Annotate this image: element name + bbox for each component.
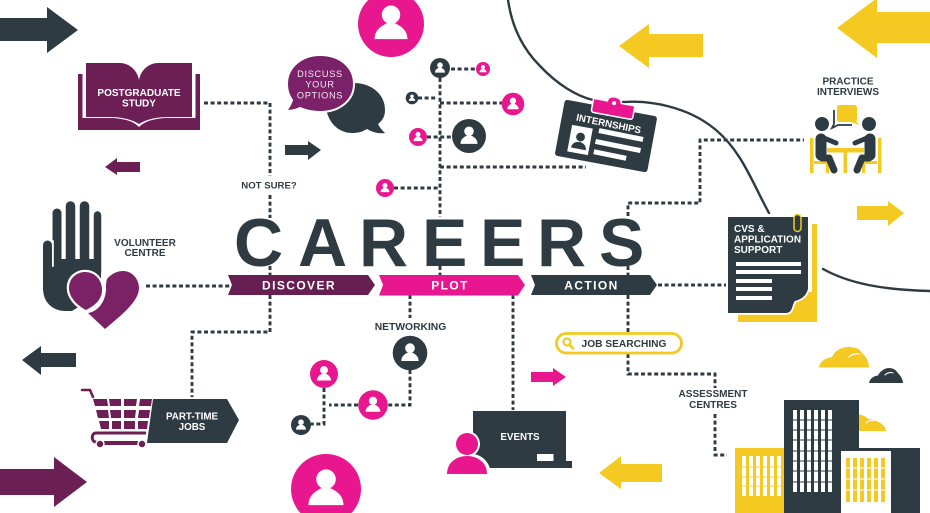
tower windows bbox=[793, 410, 832, 492]
card photo bbox=[567, 125, 593, 155]
arrow: yellow right bbox=[857, 201, 904, 226]
search pill: job searching: JOB SEARCHING bbox=[582, 339, 667, 350]
icon: volunteer hand and heart bbox=[43, 206, 139, 329]
person node: networking dark small bbox=[291, 415, 311, 435]
arrow: pink right bbox=[531, 368, 566, 386]
card lines bbox=[593, 128, 644, 161]
person node: networking dark bbox=[393, 336, 427, 370]
person node: networking pink upper bbox=[310, 360, 338, 388]
arrow: top left dark bbox=[0, 7, 78, 53]
icon: part-time jobs cart: PART-TIME bbox=[166, 412, 218, 422]
icon: cvs document bbox=[728, 214, 817, 322]
dotted connector network bbox=[146, 69, 804, 455]
person node: large dark bbox=[452, 119, 486, 153]
white building windows bbox=[846, 458, 885, 502]
text: practice interviews: PRACTICE bbox=[822, 76, 874, 88]
bubble text: DISCUSS bbox=[297, 69, 343, 79]
text: practice interviews: INTERVIEWS bbox=[817, 87, 879, 98]
person node: big pink bottom bbox=[291, 454, 361, 513]
icon: events presentation board: EVENTS bbox=[500, 432, 540, 443]
icon: cvs document: SUPPORT bbox=[734, 245, 782, 256]
icon: practice interviews table bbox=[810, 105, 882, 173]
ribbon: discover bbox=[228, 275, 375, 295]
arrow: small dark right bbox=[285, 141, 321, 160]
icon: part-time jobs cart: JOBS bbox=[179, 422, 206, 433]
icon: events presentation board bbox=[443, 411, 572, 476]
arrow: dark left bbox=[22, 346, 76, 375]
person node: pink right bbox=[502, 93, 524, 115]
person node: pink left bbox=[409, 128, 427, 146]
ribbon: plot: PLOT bbox=[431, 278, 469, 292]
person node: small pink bbox=[476, 62, 490, 76]
arrow: big purple right bbox=[0, 457, 87, 507]
icon: cvs document: CVS & bbox=[734, 224, 765, 235]
person node: small dark bbox=[406, 92, 418, 104]
icon: discuss speech bubbles bbox=[286, 55, 385, 133]
thin curved line bbox=[508, 0, 930, 291]
text: assessment centres: ASSESSMENT bbox=[679, 389, 747, 400]
person node: big pink top bbox=[358, 0, 424, 57]
arrow: yellow left top centre bbox=[619, 24, 703, 68]
title: careers: CAREERS bbox=[234, 205, 644, 281]
icon: office buildings bbox=[735, 400, 920, 513]
bubble text: OPTIONS bbox=[297, 90, 343, 100]
ribbon: action bbox=[531, 275, 657, 295]
text: assessment centres: CENTRES bbox=[689, 400, 737, 411]
yellow building windows bbox=[742, 456, 781, 496]
person node: dark top bbox=[430, 58, 450, 78]
ribbon: plot bbox=[379, 275, 525, 296]
search pill: job searching bbox=[556, 334, 682, 353]
icon: postgraduate study book bbox=[78, 63, 200, 130]
icon: internships id card bbox=[555, 93, 657, 173]
icon: part-time jobs cart bbox=[82, 390, 239, 448]
cloud: dark small bbox=[869, 368, 903, 383]
icon: cvs document: APPLICATION bbox=[734, 234, 801, 246]
text: networking: NETWORKING bbox=[375, 322, 446, 333]
arrow: yellow left top right bbox=[837, 0, 930, 58]
text: volunteer centre: CENTRE bbox=[124, 248, 166, 259]
ribbon: discover: DISCOVER bbox=[262, 278, 336, 292]
text: volunteer centre: VOLUNTEER bbox=[114, 238, 176, 249]
card clip bbox=[591, 93, 636, 120]
person node: pink lower bbox=[376, 179, 394, 197]
cloud: yellow behind building bbox=[855, 414, 886, 431]
arrow: small purple left bbox=[105, 158, 140, 175]
cloud: yellow large bbox=[819, 347, 869, 368]
book label: POSTGRADUATE bbox=[97, 88, 181, 99]
arrow: yellow left bottom bbox=[599, 456, 662, 489]
text: not sure: NOT SURE? bbox=[241, 180, 297, 192]
person node: networking pink centre bbox=[358, 390, 388, 420]
book label: STUDY bbox=[122, 99, 156, 110]
bubble text: YOUR bbox=[305, 80, 335, 90]
card title: INTERNSHIPS bbox=[575, 113, 642, 137]
ribbon: action: ACTION bbox=[564, 278, 619, 292]
